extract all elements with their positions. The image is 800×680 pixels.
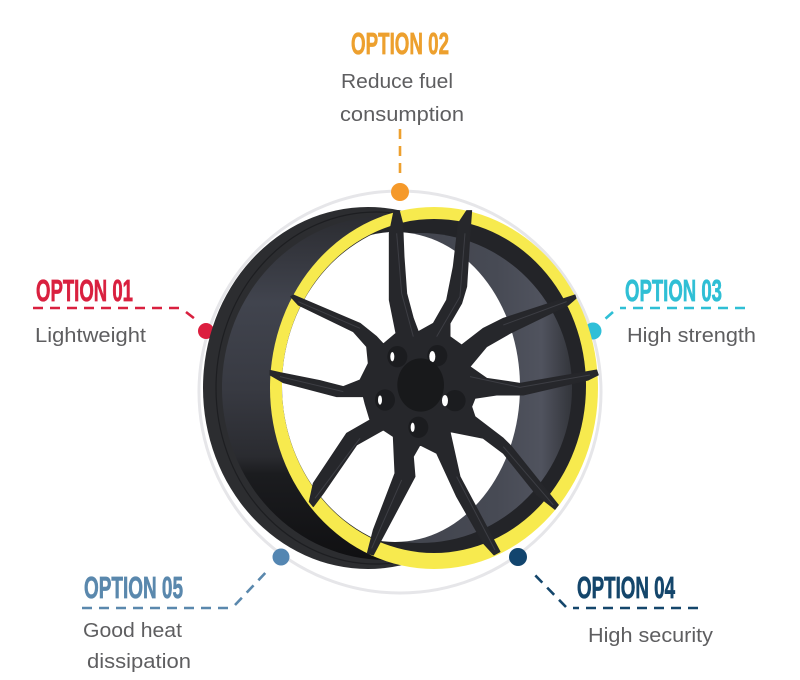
lug hole	[387, 346, 407, 367]
lug hole	[375, 389, 395, 411]
label: High security	[588, 625, 713, 647]
barrel	[203, 207, 550, 569]
spoke star	[270, 211, 598, 555]
option 01	[33, 273, 195, 347]
label: Good heat	[83, 620, 182, 642]
heading: OPTION 05	[84, 570, 183, 605]
wheel opening	[270, 232, 520, 542]
leader line	[604, 308, 745, 320]
leader line	[33, 308, 195, 319]
lug hole	[408, 417, 428, 438]
label: Lightweight	[35, 325, 146, 347]
label line 2: dissipation	[87, 651, 191, 673]
option 02	[340, 26, 464, 180]
leader line	[82, 568, 270, 608]
heading: OPTION 02	[351, 26, 449, 61]
dot: option 02	[391, 183, 409, 201]
dot: option 05	[272, 548, 290, 566]
inner rim ring	[282, 219, 586, 553]
leader line	[399, 129, 401, 180]
lug hole	[427, 345, 447, 366]
center cap	[397, 358, 444, 412]
wheel	[203, 207, 598, 569]
label: High strength	[627, 325, 756, 347]
lug hole	[442, 390, 466, 411]
label line 2: consumption	[340, 104, 464, 126]
label: Reduce fuel	[341, 71, 453, 93]
dot: option 04	[509, 548, 527, 566]
yellow rim	[270, 207, 598, 569]
heading: OPTION 01	[36, 273, 133, 308]
inner barrel	[268, 233, 572, 543]
dot: option 03	[584, 322, 602, 340]
dot: option 01	[198, 323, 214, 339]
heading: OPTION 03	[625, 273, 722, 308]
option 04	[532, 570, 713, 647]
hub	[375, 345, 466, 438]
spokes	[270, 211, 598, 555]
outer ring	[199, 191, 601, 593]
spoke highlights	[280, 233, 590, 550]
heading: OPTION 04	[577, 570, 675, 605]
option 05	[82, 568, 270, 673]
leader line	[532, 572, 698, 608]
option 03	[604, 273, 756, 347]
